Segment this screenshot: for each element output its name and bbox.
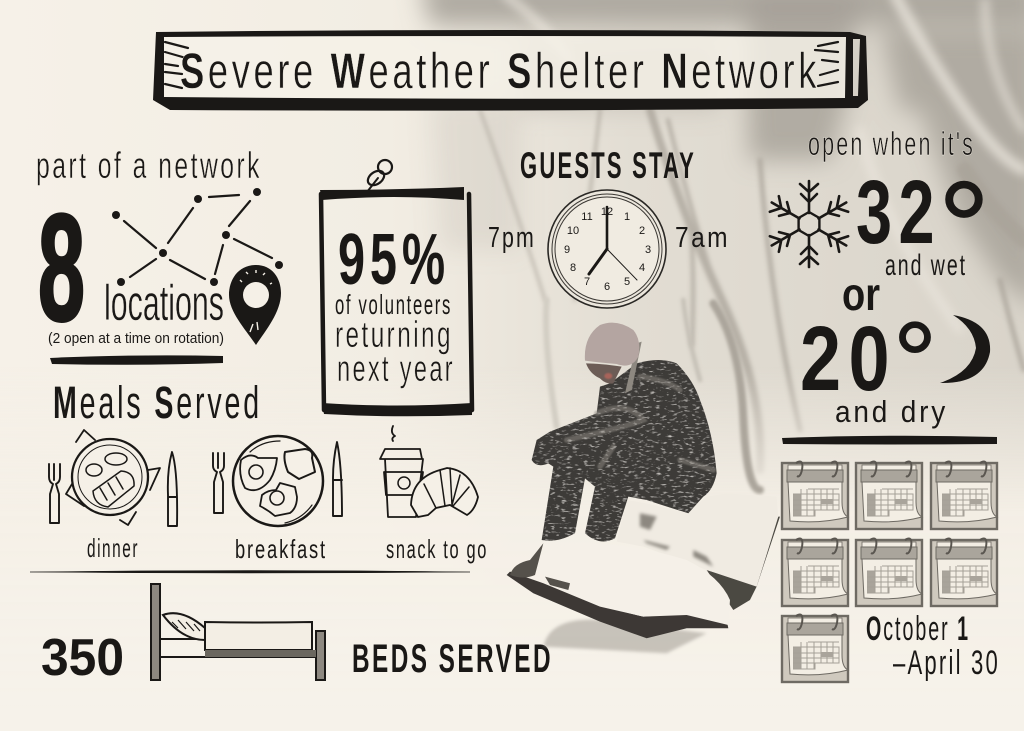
person xyxy=(532,323,717,542)
guest hours xyxy=(488,145,730,308)
returning: returning xyxy=(335,314,453,355)
icon: clock: 9 xyxy=(564,244,570,256)
dinner label: dinner xyxy=(87,533,139,563)
degree sign: ° xyxy=(893,300,937,423)
7am: 7am xyxy=(675,222,730,254)
icon: clock: 3 xyxy=(645,244,651,256)
icon: map pin xyxy=(229,265,281,345)
boots xyxy=(510,543,570,590)
icon: clock: 11 xyxy=(581,211,593,223)
breakfast label: breakfast xyxy=(235,534,327,564)
icon: clock: 1 xyxy=(624,211,630,223)
icon: push pin xyxy=(365,160,392,192)
icon: dinner plate xyxy=(49,430,177,526)
icon: moon xyxy=(940,315,990,383)
number 350: 350 xyxy=(41,629,124,687)
hood xyxy=(625,342,642,393)
stat: 95%: 95% xyxy=(338,220,450,300)
calendar icons xyxy=(782,462,997,682)
icon: coffee and croissant xyxy=(380,426,478,517)
pale trunks behind person xyxy=(546,300,760,490)
and dry: and dry xyxy=(835,394,948,429)
snow on seat xyxy=(537,543,730,625)
october 1: October 1 xyxy=(866,610,970,648)
number 8: 8 xyxy=(38,183,85,353)
7pm: 7pm xyxy=(488,222,536,254)
heading: meals served: Meals Served xyxy=(53,377,262,428)
face xyxy=(586,363,622,384)
icon: clock: 7 xyxy=(584,276,590,288)
beds served label: BEDS SERVED xyxy=(352,637,553,681)
bench back with snow xyxy=(617,493,780,610)
icon: snowflake xyxy=(767,181,851,267)
coat and legs xyxy=(532,360,717,542)
calendars panel xyxy=(782,462,1000,682)
icon: clock: 6 xyxy=(604,281,610,293)
bench seat xyxy=(507,572,728,638)
fog masses xyxy=(420,0,1024,310)
temperature panel xyxy=(767,125,990,429)
network panel xyxy=(36,145,283,353)
icon: clock: 2 xyxy=(639,225,645,237)
volunteers note xyxy=(320,160,472,416)
icon: clock: 8 xyxy=(570,262,576,274)
heading: part of a network: part of a network xyxy=(36,145,262,186)
icon: clock xyxy=(548,190,666,308)
heading: guests stay: GUESTS STAY xyxy=(520,145,696,186)
beds panel xyxy=(41,584,553,687)
20: 20 xyxy=(800,308,897,410)
shadow under bench xyxy=(543,620,707,653)
snack to go label: snack to go xyxy=(386,534,488,564)
title text: Severe Weather Shelter Network xyxy=(180,43,820,99)
next year: next year xyxy=(337,348,455,389)
icon: clock: 5 xyxy=(624,276,630,288)
of volunteers: of volunteers xyxy=(335,289,452,320)
32: 32 xyxy=(856,163,941,263)
icon: bed xyxy=(151,584,325,680)
icon: clock: 12 xyxy=(601,206,613,218)
icon: clock: 4 xyxy=(639,262,645,274)
rotation note: (2 open at a time on rotation) xyxy=(48,330,224,347)
and wet: and wet xyxy=(885,249,967,282)
locations label: locations xyxy=(104,275,224,331)
icon: breakfast plate xyxy=(213,436,342,526)
or: or xyxy=(842,268,880,320)
meals panel xyxy=(49,377,488,564)
person on bench photo xyxy=(507,300,780,653)
icon: clock: 10 xyxy=(567,225,579,237)
title banner xyxy=(153,30,868,111)
icon: network dots xyxy=(112,188,283,286)
degree sign: ° xyxy=(938,154,990,300)
